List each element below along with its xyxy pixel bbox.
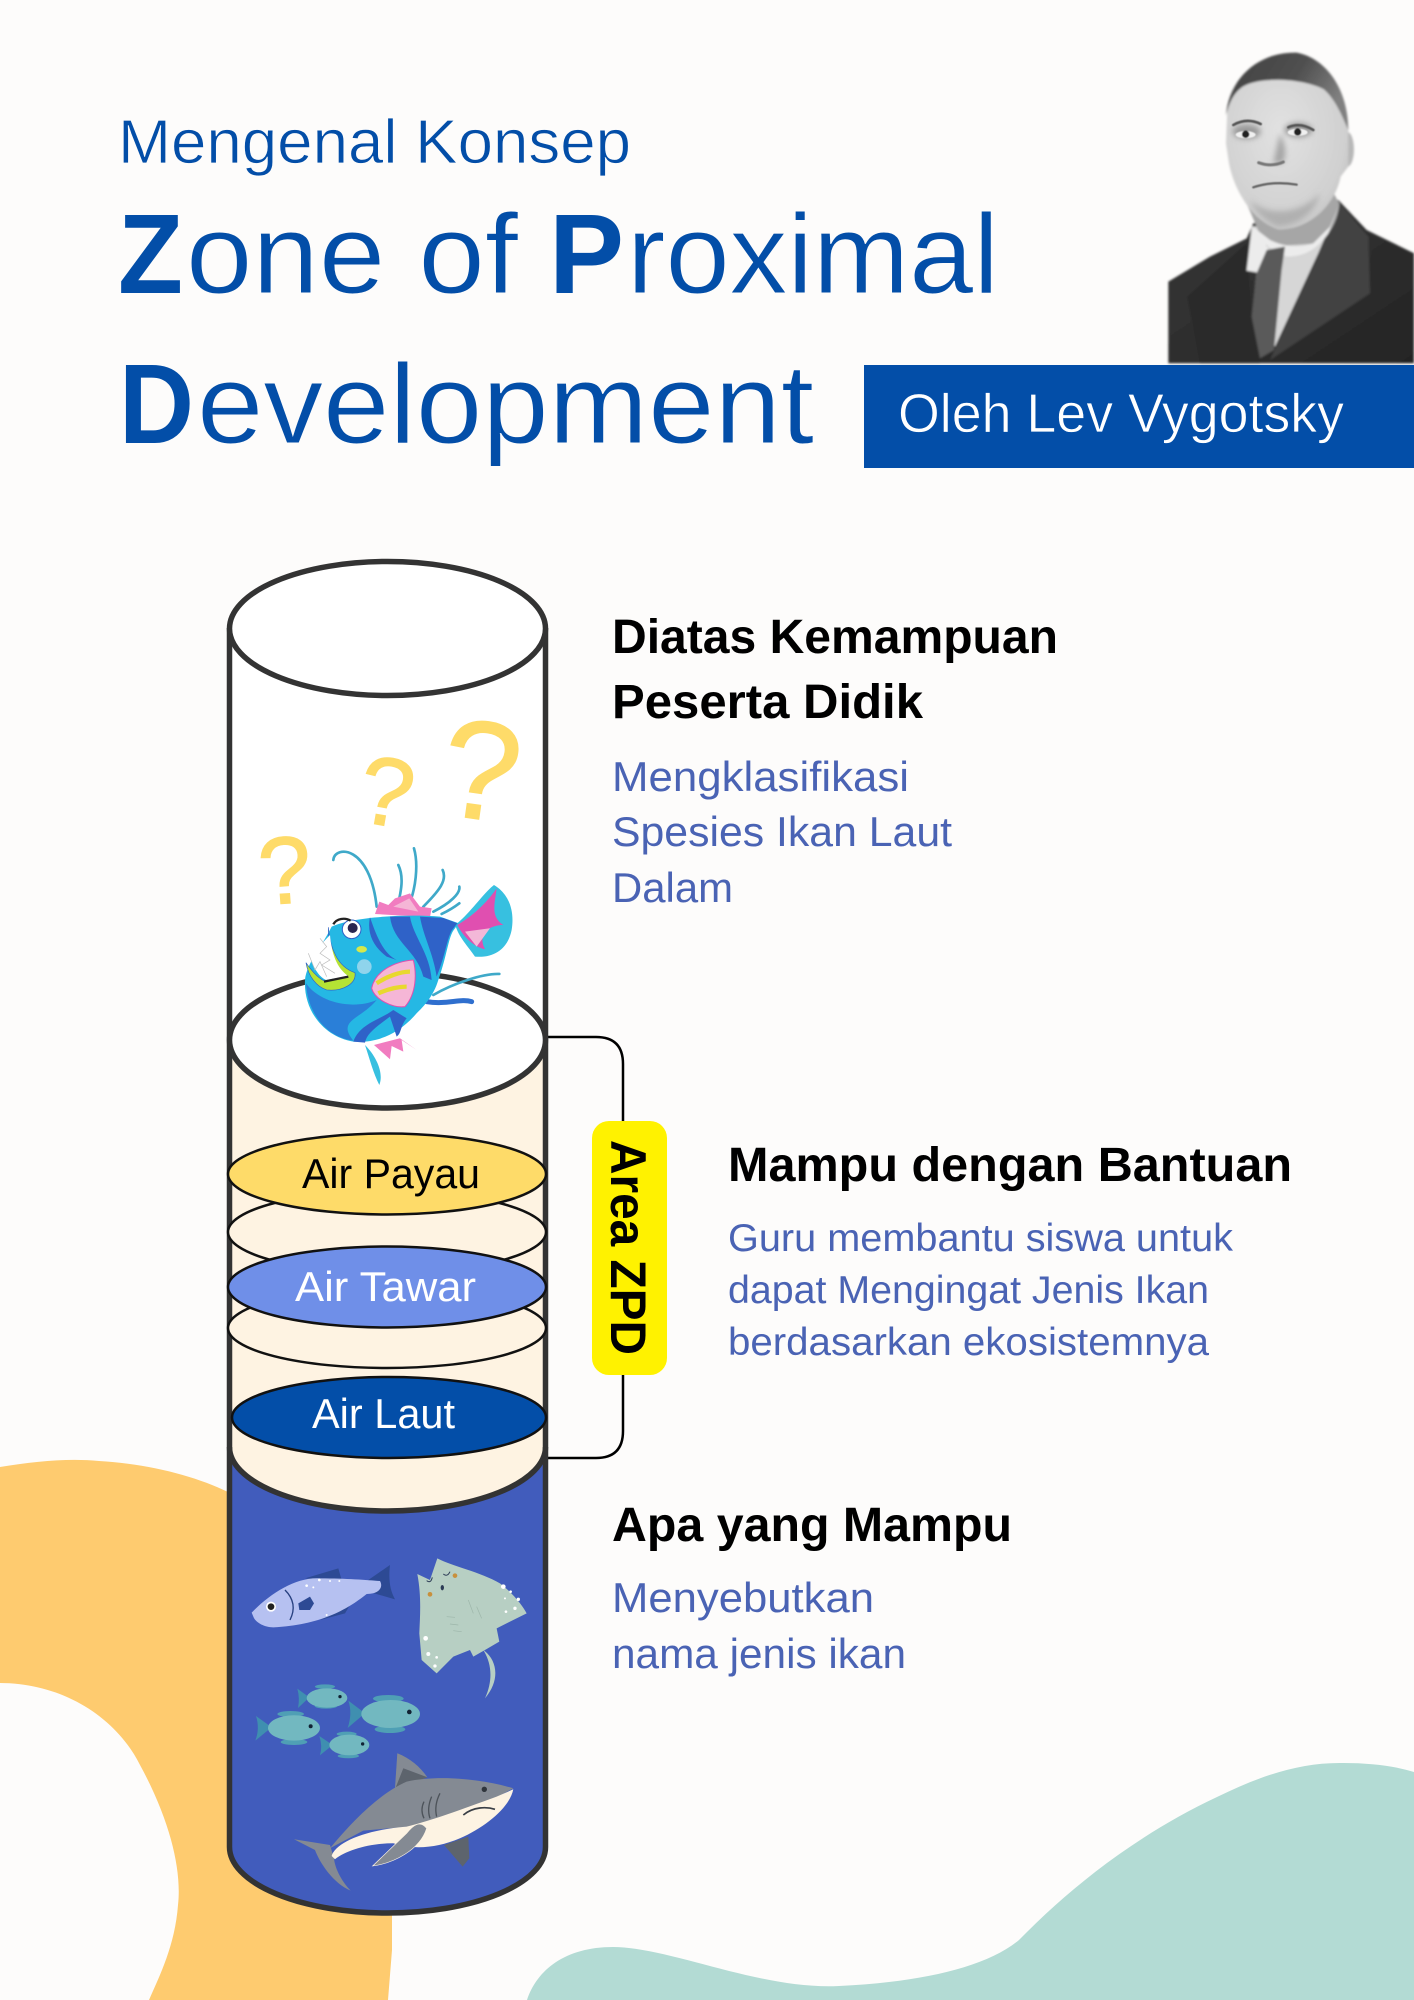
heading: Diatas Kemampuan bbox=[612, 611, 1058, 664]
title line: Zone of Proximal: Z bbox=[118, 191, 183, 317]
title line: Zone of Proximal: P bbox=[549, 191, 624, 317]
small fish 3 bbox=[255, 1711, 320, 1745]
heading: Peserta Didik bbox=[612, 676, 923, 729]
layer: Air Tawar: Air Tawar bbox=[295, 1263, 476, 1310]
layer: Air Laut bbox=[232, 1377, 546, 1458]
description: Guru membantu siswa untuk bbox=[728, 1217, 1233, 1260]
top of ZPD ellipse bbox=[230, 972, 546, 1108]
icon: shark bbox=[294, 1753, 513, 1891]
heading bbox=[612, 611, 1058, 729]
question marks: ? bbox=[432, 687, 531, 854]
title line: Zone of Proximal bbox=[118, 191, 999, 317]
icon: stingray bbox=[417, 1558, 527, 1698]
bottom fin bbox=[365, 1045, 381, 1085]
icon: blue fish bbox=[252, 1565, 395, 1627]
question marks: ? bbox=[351, 735, 422, 850]
layer: Air Laut: Air Laut bbox=[312, 1390, 455, 1437]
Area ZPD badge bbox=[592, 1121, 667, 1375]
description: Spesies Ikan Laut bbox=[612, 808, 952, 855]
cream zone lower edge bbox=[230, 1447, 546, 1511]
description: Menyebutkan bbox=[612, 1574, 874, 1621]
layer: Air Tawar bbox=[228, 1246, 546, 1328]
heading: Apa yang Mampu bbox=[612, 1499, 1012, 1552]
text block: current ability bbox=[612, 1499, 1012, 1677]
icon: school of small fish bbox=[255, 1684, 420, 1758]
cylinder walls bbox=[230, 628, 546, 1913]
banner text: Oleh Lev Vygotsky bbox=[898, 382, 1344, 444]
description bbox=[728, 1217, 1233, 1364]
blank layer ellipse bbox=[228, 1191, 546, 1273]
marine animals bbox=[252, 1558, 527, 1891]
cylinder body: middle, cream zone bbox=[230, 1040, 546, 1511]
author banner bbox=[864, 365, 1414, 468]
description: dapat Mengingat Jenis Ikan bbox=[728, 1269, 1209, 1312]
heading: Mampu dengan Bantuan bbox=[728, 1139, 1292, 1192]
small fish 2 bbox=[348, 1695, 420, 1733]
mouth bbox=[306, 927, 355, 990]
portrait photo: Lev Vygotsky bbox=[1168, 53, 1414, 363]
description: Mengklasifikasi bbox=[612, 753, 909, 800]
teal background blob bbox=[527, 1763, 1414, 2000]
connector bracket: ZPD range bbox=[547, 1037, 623, 1458]
blank layer ellipse bbox=[228, 1288, 546, 1368]
small fish 4 bbox=[319, 1732, 369, 1758]
small fish 1 bbox=[297, 1684, 347, 1709]
title line: Mengenal Konsep: Mengenal Konsep bbox=[118, 108, 631, 177]
description: Dalam bbox=[612, 864, 733, 911]
description bbox=[612, 1574, 906, 1677]
title line: Zone of Proximal: one of bbox=[186, 191, 519, 317]
pectoral fin bbox=[372, 960, 415, 1007]
title line: Development: evelopment bbox=[197, 341, 814, 467]
layer: Air Payau: Air Payau bbox=[302, 1150, 480, 1197]
cylinder top rim bbox=[230, 562, 546, 696]
orange background blob bbox=[0, 1460, 392, 2000]
question marks: ? bbox=[255, 816, 315, 926]
description: nama jenis ikan bbox=[612, 1630, 906, 1677]
icon: anglerfish bbox=[305, 848, 512, 1085]
text block: with assistance bbox=[728, 1139, 1292, 1364]
cylinder body: top, white zone bbox=[230, 628, 546, 1040]
text block: above ability bbox=[612, 611, 1058, 911]
question marks bbox=[255, 687, 531, 926]
title bbox=[118, 108, 999, 467]
description bbox=[612, 753, 952, 911]
cylinder diagram bbox=[228, 562, 546, 1913]
badge label: Area ZPD bbox=[600, 1140, 656, 1355]
title line: Zone of Proximal: roximal bbox=[627, 191, 999, 317]
layer: Air Payau bbox=[228, 1134, 546, 1214]
eye bbox=[342, 920, 361, 939]
title line: Development: D bbox=[119, 341, 194, 467]
description: berdasarkan ekosistemnya bbox=[728, 1321, 1209, 1364]
cylinder body: bottom, blue zone bbox=[230, 1440, 546, 1913]
